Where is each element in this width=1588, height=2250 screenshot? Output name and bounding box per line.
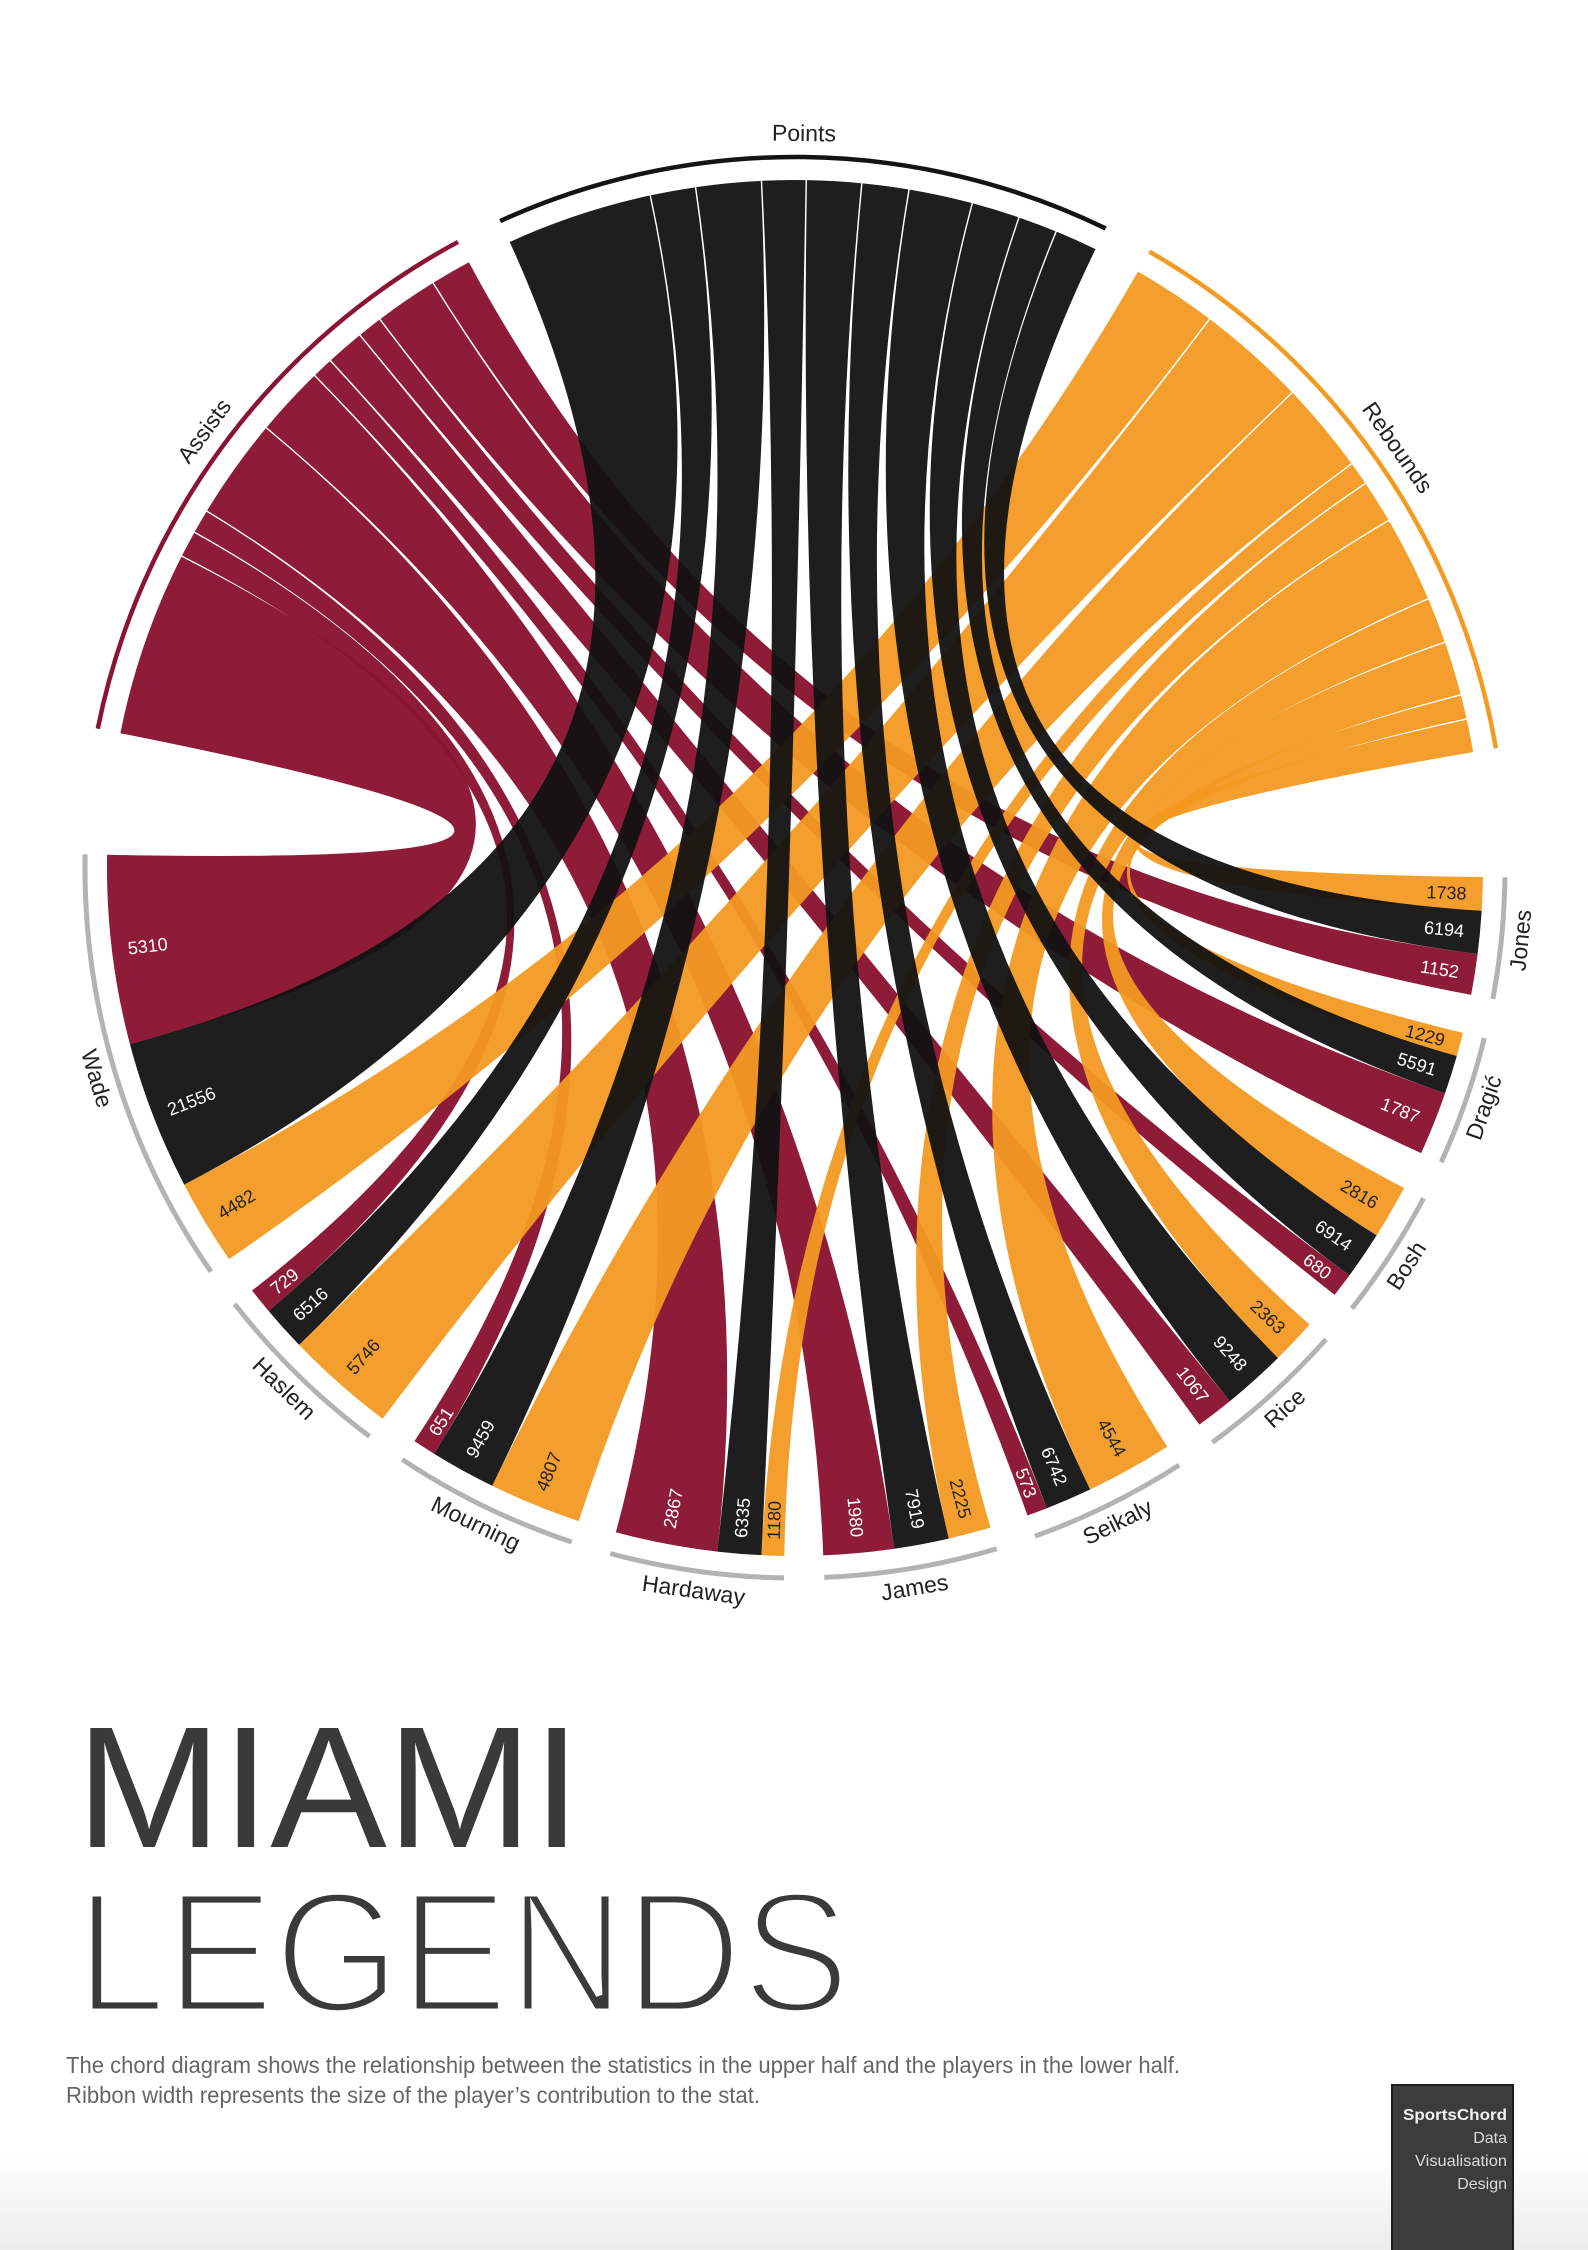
ribbon value labels: 651: [425, 1404, 458, 1440]
ribbon value labels: 6194: [1423, 917, 1465, 941]
logo box: SportsChord: [1392, 2085, 1513, 2250]
ribbon value labels: 6742: [1037, 1444, 1071, 1489]
ribbon value labels: 1738: [1426, 882, 1467, 904]
ribbon value labels: 6335: [731, 1497, 754, 1539]
stat labels: Points: [772, 120, 836, 146]
stat labels: [172, 120, 1438, 498]
ribbon value labels: 2816: [1337, 1176, 1382, 1213]
ribbon value labels: 6914: [1311, 1216, 1356, 1255]
ribbon value labels: 4544: [1093, 1416, 1130, 1460]
player labels: James: [879, 1569, 950, 1606]
ribbon value labels: 2867: [660, 1487, 687, 1530]
player labels: Seikaly: [1078, 1494, 1157, 1550]
ribbon value labels: 2225: [946, 1477, 975, 1521]
player labels: Jones: [1504, 908, 1536, 972]
player labels: Rice: [1259, 1383, 1310, 1433]
ribbon value labels: 1787: [1378, 1094, 1423, 1127]
ribbons: rebounds: [184, 272, 1483, 1556]
ribbon value labels: 9248: [1209, 1332, 1251, 1375]
title: LEGENDS: [76, 1855, 850, 2049]
logo box: SportsChord: Data: [1473, 2130, 1507, 2147]
player labels: Haslem: [247, 1352, 321, 1425]
logo box: SportsChord: Design: [1457, 2176, 1507, 2193]
ribbon value labels: 1067: [1172, 1363, 1213, 1407]
ribbons: assists: [107, 262, 1478, 1555]
ribbon value labels: 7919: [901, 1487, 928, 1530]
ribbon value labels: 680: [1299, 1250, 1335, 1284]
ribbon value labels: 9459: [462, 1417, 499, 1461]
ribbon value labels: 5310: [127, 934, 169, 959]
description: The chord diagram shows the relationship between the statistics in the upper half and the players in the lower half.: [66, 2052, 1180, 2078]
ribbon value labels: 21556: [165, 1083, 219, 1120]
ribbon value labels: 6516: [289, 1283, 332, 1325]
ribbon value labels: 4482: [214, 1185, 259, 1223]
logo box: SportsChord: Visualisation: [1415, 2153, 1507, 2170]
ribbon value labels: 1229: [1403, 1021, 1447, 1050]
ribbon value labels: 729: [267, 1264, 302, 1299]
player labels: Mourning: [427, 1491, 525, 1556]
ribbons: points: [130, 180, 1482, 1555]
title: MIAMI: [76, 1690, 581, 1884]
description: [66, 2052, 1180, 2108]
ribbon value labels: 5746: [343, 1335, 384, 1378]
ribbon value labels: 1980: [843, 1496, 867, 1538]
title: [76, 1690, 850, 2049]
ribbon value labels: 4807: [532, 1449, 566, 1494]
ribbon value labels: 5591: [1395, 1049, 1439, 1080]
player labels: Wade: [76, 1046, 118, 1111]
ribbon value labels: [127, 882, 1467, 1540]
ribbon value labels: 2363: [1246, 1296, 1289, 1338]
ribbon value labels: 573: [1011, 1465, 1041, 1501]
player labels: Bosh: [1381, 1236, 1431, 1294]
player labels: [76, 908, 1536, 1610]
ribbon value labels: 1180: [764, 1501, 785, 1540]
stat labels: Rebounds: [1357, 397, 1438, 498]
description: Ribbon width represents the size of the player’s contribution to the stat.: [66, 2082, 760, 2108]
player labels: Hardaway: [641, 1570, 747, 1610]
logo box: SportsChord: SportsChord: [1403, 2107, 1507, 2124]
player labels: Dragić: [1460, 1072, 1507, 1143]
ribbon value labels: 1152: [1419, 956, 1460, 982]
stat labels: Assists: [172, 394, 236, 468]
